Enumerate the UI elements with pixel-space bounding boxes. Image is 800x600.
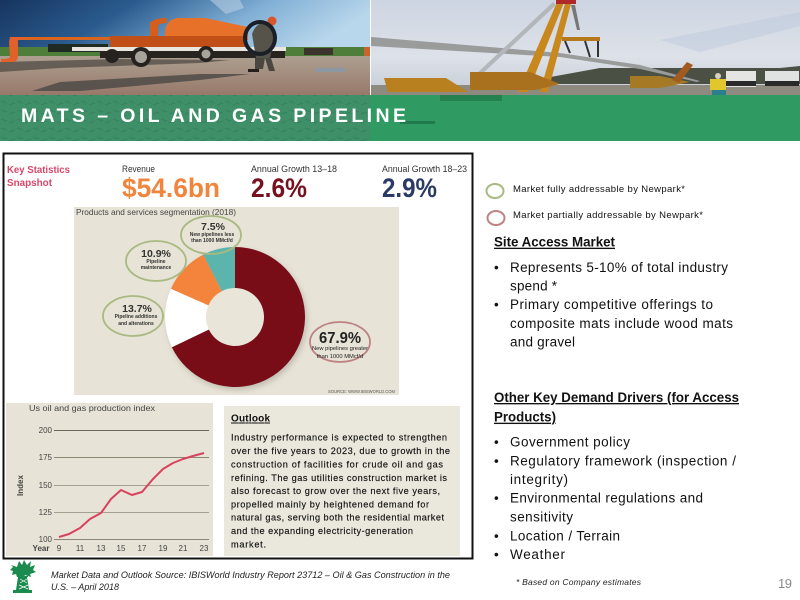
stat: revenue: $54.6bn: [122, 173, 220, 203]
legend: market partially addressable: [488, 210, 703, 225]
callout: 10.9%: maintenance: [141, 265, 171, 271]
list: demand drivers: Environmental regulations and: [510, 491, 703, 506]
outlook text: natural gas, serving both the residential market: [231, 513, 444, 523]
outlook text: refining. The gas utilities construction market is: [231, 473, 447, 483]
legend: market fully addressable: [486, 184, 685, 198]
source note: [51, 570, 450, 592]
key statistics heading: Snapshot: [7, 178, 53, 189]
x axis labels: 11: [76, 544, 85, 553]
outlook text: Industry performance is expected to strengthen: [231, 433, 447, 443]
x axis labels: Year: [33, 544, 49, 553]
list: demand drivers: •: [494, 435, 499, 450]
stat: annual growth 13-18: Annual Growth 13–18: [251, 164, 337, 174]
outlook text: over the five years to 2023, due to growth in the: [231, 446, 450, 456]
callout: 67.9%: 67.9%: [319, 330, 361, 347]
header: left photo of orange pipeline rig: [0, 0, 370, 95]
list: site access market: Primary competitive offerings to: [510, 297, 713, 312]
panel: market report snapshot: [4, 154, 472, 558]
stat: annual growth 18-23: 2.9%: [382, 173, 437, 203]
list: site access market: spend *: [510, 279, 558, 294]
outlook text: propelled mainly by heightened demand for: [231, 500, 429, 510]
panel: products and services segmentation: [74, 207, 399, 395]
list: site access market: Represents 5-10% of total industry: [510, 260, 728, 275]
list: site access market: [494, 260, 733, 350]
x axis labels: 13: [97, 544, 106, 553]
yellow crane: [384, 0, 693, 92]
callout: 67.9%: than 1000 MMcf/d: [317, 354, 363, 360]
heading: other key demand drivers: Other Key Demand Drivers (for Access: [494, 390, 739, 405]
outlook text: market.: [231, 540, 266, 550]
callout: 10.9%: [126, 241, 186, 281]
panel: products and services segmentation: Products and services segmentation (2018): [76, 207, 236, 217]
list: demand drivers: •: [494, 491, 499, 506]
list: demand drivers: Government policy: [510, 435, 630, 450]
icon: green tree logo: [10, 560, 36, 593]
x axis labels: 21: [179, 544, 188, 553]
x axis labels: 15: [117, 544, 126, 553]
heading: other key demand drivers: Products): [494, 410, 556, 425]
callout: 67.9%: New pipelines greater: [312, 346, 368, 352]
list: demand drivers: [494, 435, 736, 562]
header: right photo of pipeline lift: [371, 0, 800, 105]
list: demand drivers: •: [494, 529, 499, 544]
list: site access market: composite mats include wood mats: [510, 316, 733, 331]
y axis title: Index: [16, 475, 25, 496]
stat: annual growth 13-18: [251, 164, 337, 203]
callout: 13.7%: 13.7%: [122, 303, 153, 315]
list: demand drivers: sensitivity: [510, 510, 573, 525]
panel: production index line chart: [6, 403, 213, 556]
callout: 67.9%: [310, 322, 370, 362]
list: demand drivers: Regulatory framework (inspection /: [510, 454, 736, 469]
outlook text: construction of facilities for crude oil and gas: [231, 460, 443, 470]
x axis labels: 9: [57, 544, 62, 553]
outlook text: also forecast to grow over the next five years,: [231, 486, 440, 496]
stat: annual growth 18-23: [382, 164, 467, 203]
worker carrying hose: [245, 16, 276, 72]
callout: 7.5%: than 1000 MMcf/d: [191, 238, 233, 244]
list: site access market: •: [494, 297, 499, 312]
y axis labels: 100: [39, 535, 53, 544]
outlook text: and the expanding electricity-generation: [231, 526, 413, 536]
lifted pipe: [371, 37, 700, 82]
list: site access market: and gravel: [510, 335, 575, 350]
callout: 13.7%: [103, 296, 163, 336]
source note: SOURCE: WWW.IBISWORLD.COM: [328, 389, 396, 394]
list: demand drivers: Weather: [510, 547, 566, 562]
callout: 7.5%: [181, 216, 241, 254]
list: demand drivers: integrity): [510, 472, 568, 487]
list: demand drivers: •: [494, 547, 499, 562]
callout: 13.7%: and alterations: [118, 321, 154, 327]
header: green mat band: [0, 95, 800, 141]
legend: market partially addressable: Market partially addressable by Newpark*: [513, 210, 703, 221]
y axis labels: 175: [39, 453, 53, 462]
y axis labels: [39, 426, 53, 544]
callout: 10.9%: 10.9%: [141, 248, 172, 260]
outlook heading: Outlook: [231, 414, 270, 424]
panel: outlook: [224, 406, 460, 556]
outlook text: [231, 433, 450, 550]
panel: production index line chart: Us oil and gas production index: [29, 403, 156, 413]
heading: site access market: Site Access Market: [494, 235, 615, 250]
x axis labels: [33, 544, 209, 553]
stat: annual growth 18-23: Annual Growth 18–23: [382, 164, 467, 174]
list: demand drivers: •: [494, 454, 499, 469]
line series: [59, 453, 204, 537]
callout: 10.9%: Pipeline: [146, 259, 166, 265]
source note: U.S. – April 2018: [51, 582, 119, 592]
key statistics heading: Key Statistics: [7, 165, 70, 176]
legend: market fully addressable: Market fully addressable by Newpark*: [513, 184, 685, 195]
key statistics heading: [7, 165, 70, 189]
x axis labels: 23: [200, 544, 209, 553]
y axis labels: 200: [39, 426, 53, 435]
y axis labels: 125: [39, 508, 53, 517]
title: MATS – OIL AND GAS PIPELINE: [21, 105, 406, 127]
stat: revenue: Revenue: [122, 164, 155, 174]
orange tank: [1, 18, 286, 67]
donut chart: [165, 247, 307, 390]
list: site access market: •: [494, 260, 499, 275]
footnote: * Based on Company estimates: [516, 577, 642, 587]
heading: other key demand drivers: [494, 390, 739, 425]
x axis labels: 17: [138, 544, 147, 553]
page number: 19: [778, 576, 792, 591]
x axis labels: 19: [159, 544, 168, 553]
y axis labels: 150: [39, 481, 53, 490]
list: demand drivers: Location / Terrain: [510, 529, 620, 544]
source note: Market Data and Outlook Source: IBISWorld Industry Report 23712 – Oil & Gas Construction in the: [51, 570, 450, 580]
callout: 7.5%: New pipelines less: [190, 232, 234, 238]
trucks and worker: [710, 71, 799, 105]
callout: 13.7%: Pipeline additions: [115, 314, 158, 320]
callout: 7.5%: 7.5%: [201, 221, 226, 233]
stat: annual growth 13-18: 2.6%: [251, 173, 307, 203]
